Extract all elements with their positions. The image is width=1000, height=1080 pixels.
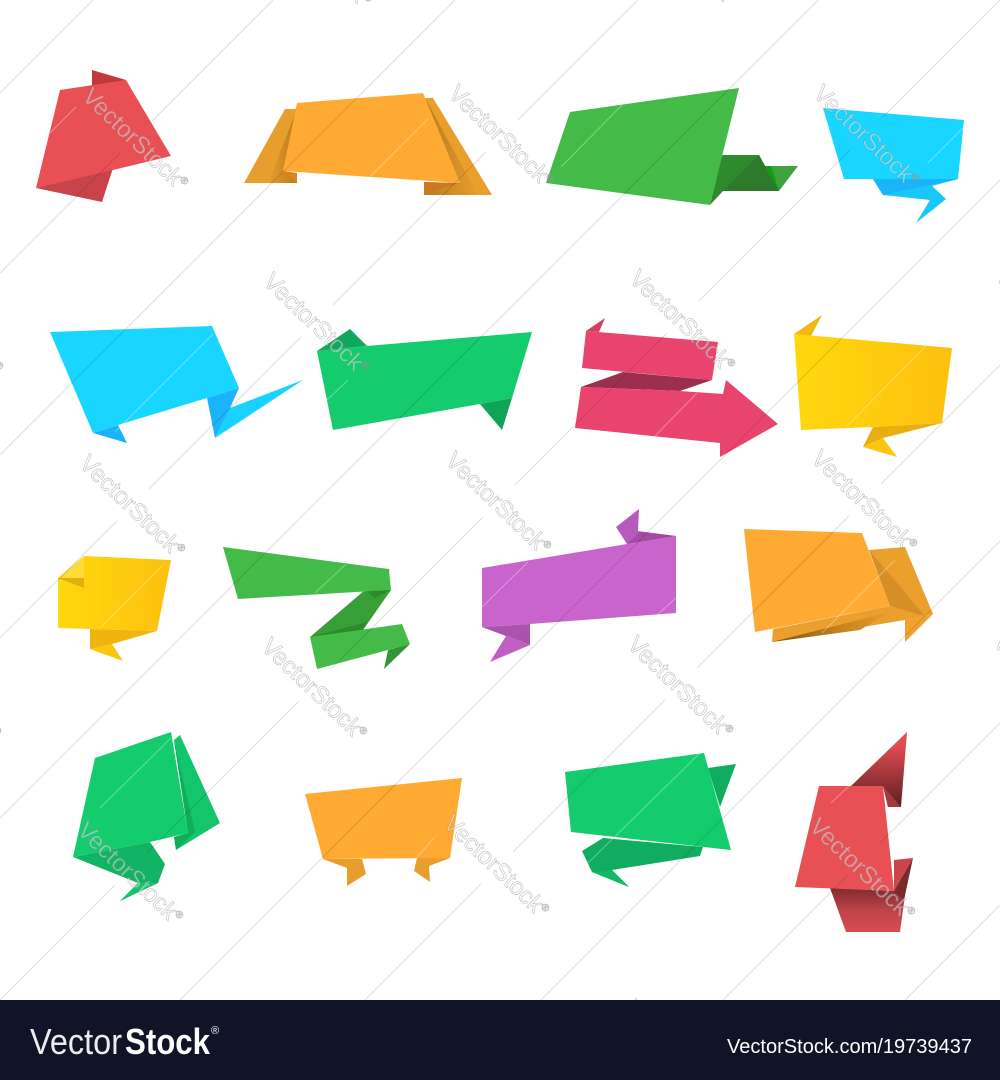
banner: pink arrow bbox=[575, 318, 778, 457]
banner: orange trapezoid bbox=[244, 93, 492, 195]
watermarks: ® bbox=[724, 357, 738, 370]
banner: emerald wide bbox=[317, 329, 532, 430]
watermarks: VectorStock bbox=[440, 447, 551, 555]
watermarks: VectorStock bbox=[443, 80, 554, 188]
watermarks: ® bbox=[177, 175, 191, 188]
watermarks: ® bbox=[906, 537, 920, 550]
watermarks: ® bbox=[174, 542, 188, 555]
watermarks: VectorStock bbox=[808, 80, 919, 188]
banner: orange with shadowed back bbox=[744, 529, 933, 642]
watermarks: VectorStock bbox=[256, 633, 367, 741]
banner: green with back fold bbox=[546, 88, 798, 205]
watermarks: ® bbox=[904, 905, 918, 918]
watermarks: VectorStock bbox=[624, 265, 735, 373]
banner: cyan lightning tail bbox=[50, 326, 303, 443]
watermarks: V bbox=[620, 995, 650, 1025]
footer logo: ® bbox=[211, 1025, 219, 1037]
footer bar bbox=[0, 1000, 1000, 1080]
banner: orange with two tails bbox=[305, 778, 462, 886]
footer logo bbox=[30, 1021, 219, 1062]
banner: purple ribbon bbox=[482, 509, 676, 662]
watermarks: ® bbox=[356, 725, 370, 738]
watermarks: V bbox=[254, 997, 284, 1027]
watermarks: VectorStock bbox=[77, 83, 188, 191]
footer logo: Vector bbox=[30, 1021, 122, 1062]
banner: emerald with lower tail bbox=[565, 753, 736, 887]
watermarks: ® bbox=[908, 172, 922, 185]
banner: green zigzag bbox=[223, 547, 410, 669]
watermarks: ® bbox=[358, 360, 372, 373]
watermarks: ® bbox=[172, 909, 186, 922]
banner: small yellow with curled corner bbox=[58, 556, 171, 661]
watermarks: ® bbox=[543, 172, 557, 185]
watermarks: VectorStock bbox=[72, 817, 183, 925]
banner: red folded vertical bbox=[795, 732, 913, 932]
banner: yellow speech bbox=[794, 315, 952, 457]
watermarks: VectorStock bbox=[258, 268, 369, 376]
footer image id: VectorStock.com/19739437 bbox=[727, 1036, 972, 1058]
watermarks: VectorStock bbox=[804, 813, 915, 921]
watermarks: ® bbox=[540, 539, 554, 552]
watermarks: ® bbox=[538, 902, 552, 915]
banner: emerald speech bbox=[73, 732, 220, 901]
watermarks: ® bbox=[722, 723, 736, 736]
watermarks: VectorStock bbox=[74, 450, 185, 558]
watermarks: VectorStock bbox=[438, 810, 549, 918]
footer logo: Stock bbox=[125, 1021, 211, 1062]
banner: cyan speech top right bbox=[823, 108, 964, 223]
watermarks: VectorStock bbox=[806, 445, 917, 553]
banner: red top left bbox=[36, 70, 171, 202]
watermarks: VectorStock bbox=[622, 631, 733, 739]
